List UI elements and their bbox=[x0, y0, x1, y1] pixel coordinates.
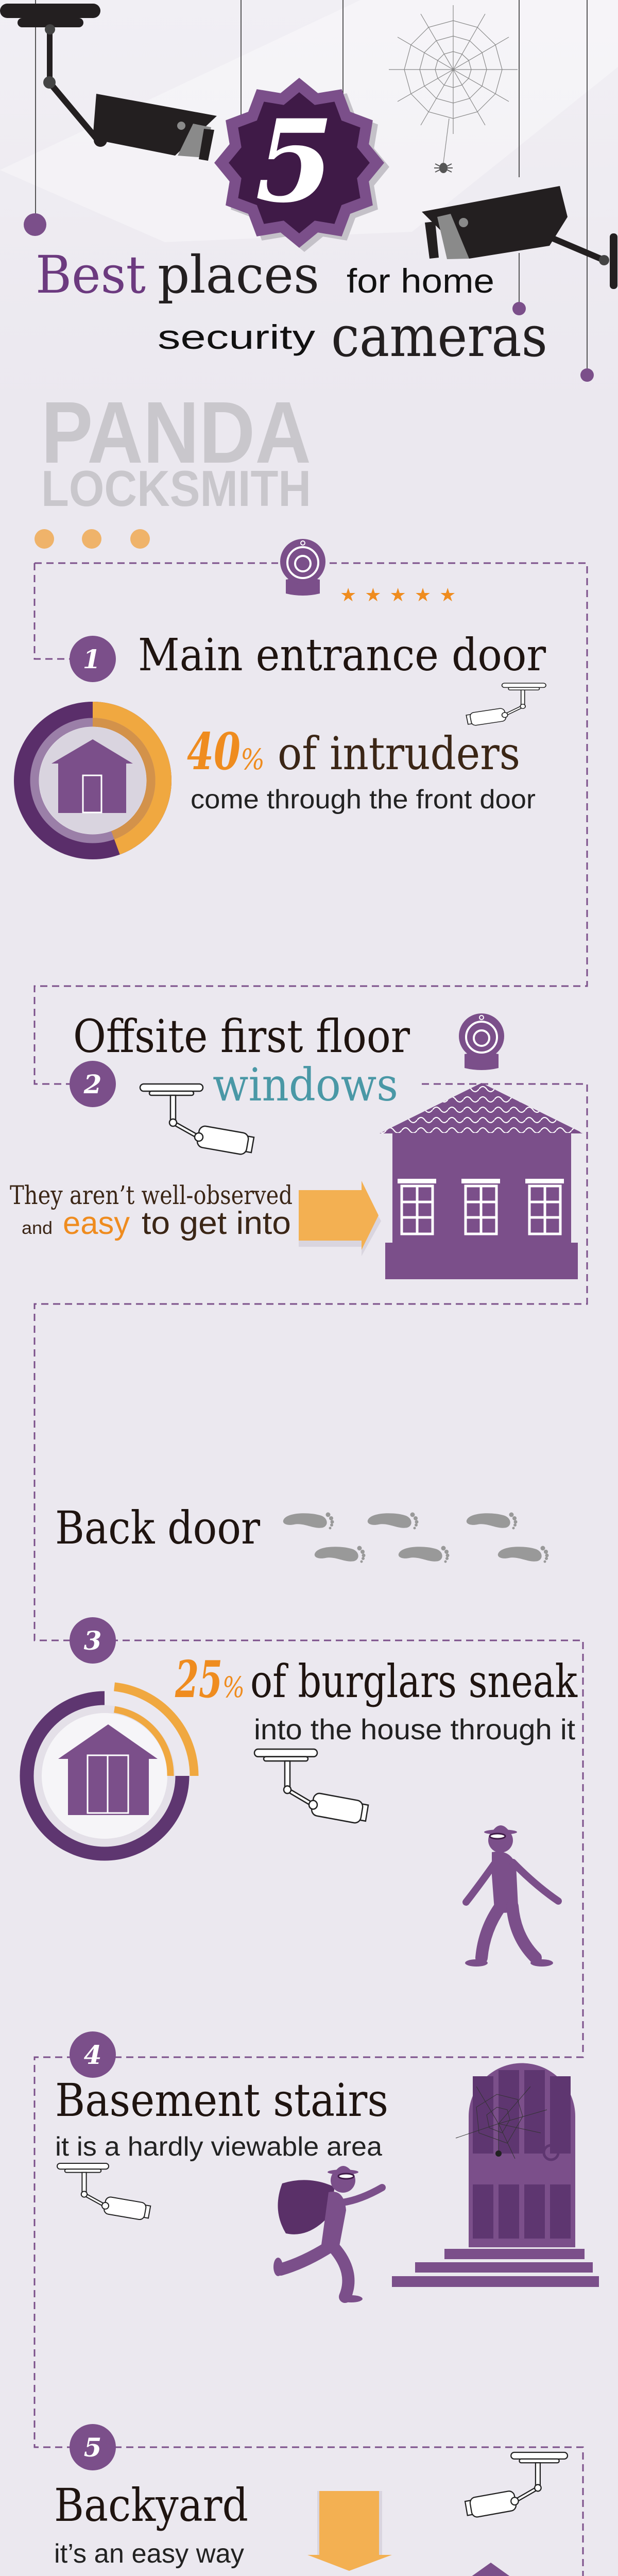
donut chart 40% bbox=[22, 710, 163, 851]
stat: 40% of intruders: come through the front door bbox=[191, 785, 536, 815]
house with fence bbox=[374, 2563, 599, 2576]
badge 3: 3 bbox=[84, 1625, 101, 1656]
icon: camera outline 5 bbox=[465, 2452, 568, 2519]
text: well-observed bbox=[10, 1180, 293, 1241]
icon: left security camera bbox=[0, 4, 217, 161]
stars rating: ★★★★★ bbox=[340, 585, 464, 606]
badge 4 bbox=[70, 2031, 116, 2078]
icon: camera outline 1 bbox=[466, 683, 546, 726]
text: well-observed: easy bbox=[63, 1206, 130, 1241]
heading: Offsite first floor windows: windows bbox=[213, 1058, 398, 1111]
house with windows bbox=[380, 1083, 583, 1279]
badge 1: 1 bbox=[83, 644, 100, 674]
section 1: main entrance door bbox=[22, 630, 546, 851]
heading: Offsite first floor windows: Offsite first floor bbox=[73, 1010, 410, 1063]
donut chart 25% bbox=[27, 1687, 194, 1854]
icon: right security camera bbox=[422, 186, 617, 289]
stat: 25% of burglars: into the house through it bbox=[254, 1713, 575, 1745]
badge 4: 4 bbox=[84, 2040, 101, 2070]
subtext: it’s an easy way bbox=[54, 2539, 244, 2569]
title: cameras bbox=[331, 303, 547, 369]
logo: Panda Locksmith: PANDA bbox=[41, 384, 311, 482]
stat: 40% of intruders bbox=[187, 722, 536, 815]
stat: 40% of intruders: % bbox=[241, 743, 265, 776]
badge 2: 2 bbox=[83, 1069, 101, 1099]
badge 2 bbox=[70, 1061, 116, 1107]
icon: camera outline 4 bbox=[57, 2163, 151, 2221]
subtext bbox=[54, 2539, 421, 2576]
section 5: backyard bbox=[24, 2424, 599, 2576]
badge 5: 5 bbox=[84, 2432, 101, 2463]
text: well-observed: to get into bbox=[142, 1206, 291, 1241]
badge: number 5 bbox=[214, 78, 389, 252]
hanging lines and balls bbox=[24, 0, 594, 382]
orange dots bbox=[35, 529, 150, 549]
stat: 25% of burglars: % bbox=[222, 1671, 245, 1704]
dashed path bbox=[35, 563, 587, 2576]
arrow right bbox=[299, 1181, 381, 1256]
badge: number 5: 5 bbox=[255, 94, 334, 228]
stat: 40% of intruders: of intruders bbox=[278, 727, 520, 780]
logo: Panda Locksmith: LOCKSMITH bbox=[41, 460, 311, 517]
title bbox=[36, 245, 547, 369]
burglar walking bbox=[465, 1825, 558, 1967]
stat: 25% of burglars: 25 bbox=[175, 1650, 222, 1709]
stat: 40% of intruders: 40 bbox=[187, 722, 241, 782]
icon: camera outline 2 bbox=[140, 1084, 254, 1156]
title: places bbox=[158, 245, 319, 305]
icon: webcam 2 bbox=[459, 1013, 504, 1070]
arrow down bbox=[307, 2491, 392, 2571]
basement door with steps bbox=[392, 2063, 599, 2287]
section 2: offsite first floor windows bbox=[10, 1010, 583, 1279]
text: well-observed: and bbox=[22, 1218, 53, 1238]
text: well-observed: They aren’t well-observed bbox=[10, 1180, 293, 1210]
badge 5 bbox=[70, 2424, 116, 2470]
title: for home bbox=[347, 262, 494, 300]
logo: Panda Locksmith bbox=[41, 384, 311, 517]
icon: camera outline 3 bbox=[254, 1749, 369, 1825]
icon: spider bbox=[434, 163, 453, 173]
section 4: basement stairs bbox=[55, 2031, 599, 2302]
title: security bbox=[158, 318, 315, 356]
heading: Back door: Back door bbox=[55, 1501, 261, 1554]
badge 1 bbox=[70, 636, 116, 682]
title: Best bbox=[36, 245, 146, 305]
heading: Backyard: Backyard bbox=[54, 2479, 248, 2532]
heading: Main entrance door: Main entrance door bbox=[138, 630, 546, 681]
heading: Offsite first floor windows bbox=[73, 1010, 410, 1111]
section 3: back door bbox=[27, 1501, 578, 1967]
icon: webcam top bbox=[280, 539, 325, 596]
badge 3 bbox=[70, 1617, 116, 1664]
stat: 25% of burglars bbox=[175, 1650, 578, 1745]
subtext: it is a hardly viewable area bbox=[55, 2132, 382, 2162]
icon: spider web bbox=[389, 5, 518, 163]
burglar running with bag bbox=[273, 2166, 382, 2302]
icon: footprints bbox=[283, 1513, 549, 1563]
heading: Basement stairs: Basement stairs bbox=[55, 2074, 388, 2127]
